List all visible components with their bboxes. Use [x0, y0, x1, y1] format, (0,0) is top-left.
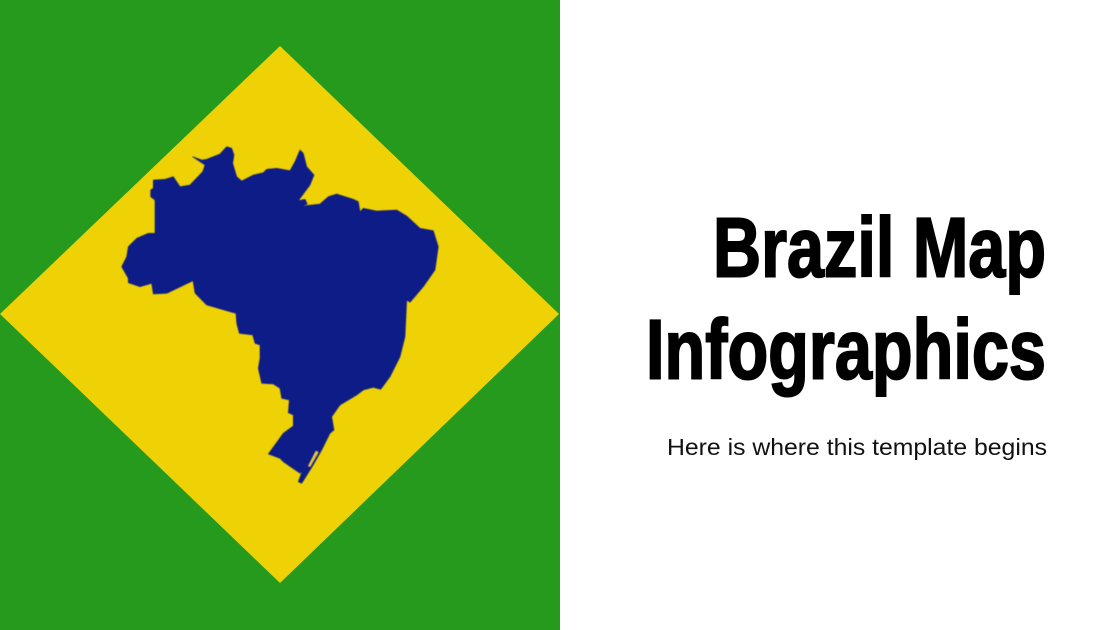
subtitle: Here is where this template begins — [667, 434, 1047, 460]
map: Brazil silhouette — [122, 147, 438, 483]
flag yellow diamond — [0, 46, 559, 583]
flag green field — [0, 0, 560, 630]
panel: Brazilian flag — [0, 0, 560, 630]
title — [646, 200, 1046, 396]
